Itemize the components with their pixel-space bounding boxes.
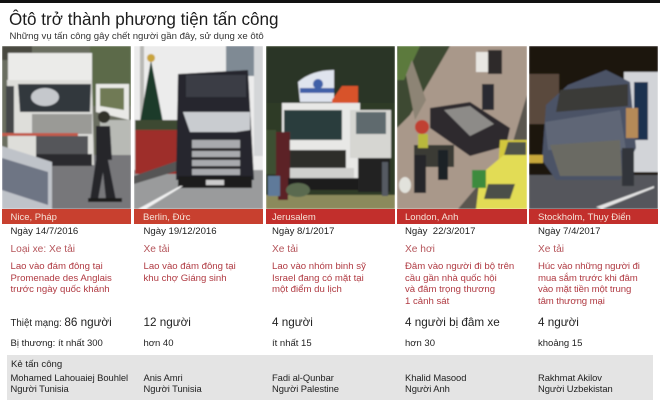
attacker: Nice xyxy=(10,372,128,394)
injured: London: hơn 30 xyxy=(405,338,435,349)
attacker: London: Khalid Masood xyxy=(405,372,466,382)
description: Berlin: Lao vào đám đông tại xyxy=(144,261,236,272)
location bar: London xyxy=(397,209,527,224)
description: London: cầu gần nhà quốc hội xyxy=(405,273,497,284)
attacker: Stockholm xyxy=(538,372,613,394)
photo strip xyxy=(2,46,658,209)
description: Nice: Promenade des Anglais xyxy=(10,273,112,284)
description: Stockholm: Húc vào những người đi xyxy=(538,261,640,272)
location bar: Nice xyxy=(2,209,131,224)
location bar: London: London, Anh xyxy=(405,212,458,223)
description: Stockholm xyxy=(538,261,640,307)
description: London xyxy=(405,261,514,307)
deaths: Berlin: 12 người xyxy=(144,316,191,329)
vehicle: Nice: Loại xe: Xe tải xyxy=(10,244,75,255)
photo: Nice truck xyxy=(2,46,131,209)
deaths: Nice: Thiệt mạng: 86 người xyxy=(10,316,112,329)
description: Nice xyxy=(10,261,112,295)
deaths: London: 4 người bị đâm xe xyxy=(405,316,500,329)
date: London: Ngày 22/3/2017 xyxy=(405,226,475,237)
title: Ôtô trở thành phương tiện tấn công xyxy=(9,10,279,29)
attacker: London: Người Anh xyxy=(405,383,450,394)
attacker: Stockholm: Người Uzbekistan xyxy=(538,383,613,394)
description: London: và đâm trọng thương xyxy=(405,284,495,295)
attacker: Jerusalem: Fadi al-Qunbar xyxy=(272,372,334,382)
date: Berlin: Ngày 19/12/2016 xyxy=(144,226,217,237)
attacker: Berlin: Anis Amri xyxy=(144,372,183,382)
attacker: Berlin: Người Tunisia xyxy=(144,383,202,394)
injured: Stockholm: khoảng 15 xyxy=(538,338,582,349)
location bar: Stockholm: Stockholm, Thụy Điển xyxy=(538,212,631,223)
attacker: Jerusalem xyxy=(272,372,339,394)
description: Jerusalem: Israel đang có mặt tại xyxy=(272,273,364,284)
location bar: Jerusalem: Jerusalem xyxy=(272,212,316,223)
description: Berlin: khu chợ Giáng sinh xyxy=(144,273,227,284)
description: Stockholm: vào mặt tiền một trung xyxy=(538,284,631,295)
vehicle: Stockholm: Xe tải xyxy=(538,244,564,255)
date: Nice: Ngày 14/7/2016 xyxy=(10,226,78,237)
deaths: Stockholm: 4 người xyxy=(538,316,579,329)
description: Jerusalem: một điểm du lịch xyxy=(272,284,342,295)
location bar: Berlin: Berlin, Đức xyxy=(143,212,191,223)
photo: Jerusalem truck xyxy=(266,46,395,209)
injured: Jerusalem: ít nhất 15 xyxy=(272,338,312,349)
deaths: Jerusalem: 4 người xyxy=(272,316,313,329)
description: Jerusalem xyxy=(272,261,366,295)
location bar: Nice: Nice, Pháp xyxy=(10,212,57,223)
description: Nice: Lao vào đám đông tại xyxy=(10,261,103,272)
photo: Stockholm truck xyxy=(529,46,658,209)
attacker: Jerusalem: Người Palestine xyxy=(272,383,339,394)
attacker: Nice: Mohamed Lahouaiej Bouhlel xyxy=(10,372,128,382)
location bar: Berlin xyxy=(134,209,263,224)
description: London: 1 cảnh sát xyxy=(405,296,449,307)
attackers panel xyxy=(7,355,653,400)
description: Berlin xyxy=(144,261,236,284)
vehicle: Berlin: Xe tải xyxy=(144,244,170,255)
description: London: Đâm vào người đi bộ trên xyxy=(405,261,514,272)
vehicle: London: Xe hơi xyxy=(405,244,435,255)
vehicle: Jerusalem: Xe tải xyxy=(272,244,298,255)
top black rule xyxy=(0,0,660,2)
photo: Berlin truck xyxy=(134,46,263,209)
attacker: Berlin xyxy=(144,372,202,394)
subtitle: Những vụ tấn công gây chết người gần đây, sử dụng xe ôtô xyxy=(10,30,264,42)
attacker: London xyxy=(405,372,466,394)
description: Nice: trước ngày quốc khánh xyxy=(10,284,110,295)
injured: Berlin: hơn 40 xyxy=(144,338,174,349)
date: Jerusalem: Ngày 8/1/2017 xyxy=(272,226,334,237)
attackers heading: Kẻ tấn công xyxy=(11,358,62,370)
description: Jerusalem: Lao vào nhóm binh sỹ xyxy=(272,261,366,272)
attacker: Stockholm: Rakhmat Akilov xyxy=(538,372,602,382)
photo: London car xyxy=(397,46,527,209)
location bar: Stockholm xyxy=(529,209,658,224)
description: Stockholm: mua sắm trước khi đâm xyxy=(538,273,638,284)
location bar: Jerusalem xyxy=(266,209,395,224)
date: Stockholm: Ngày 7/4/2017 xyxy=(538,226,600,237)
description: Stockholm: tâm thương mại xyxy=(538,296,605,307)
injured: Nice: Bị thương: ít nhất 300 xyxy=(10,338,103,349)
attacker: Nice: Người Tunisia xyxy=(10,383,69,394)
